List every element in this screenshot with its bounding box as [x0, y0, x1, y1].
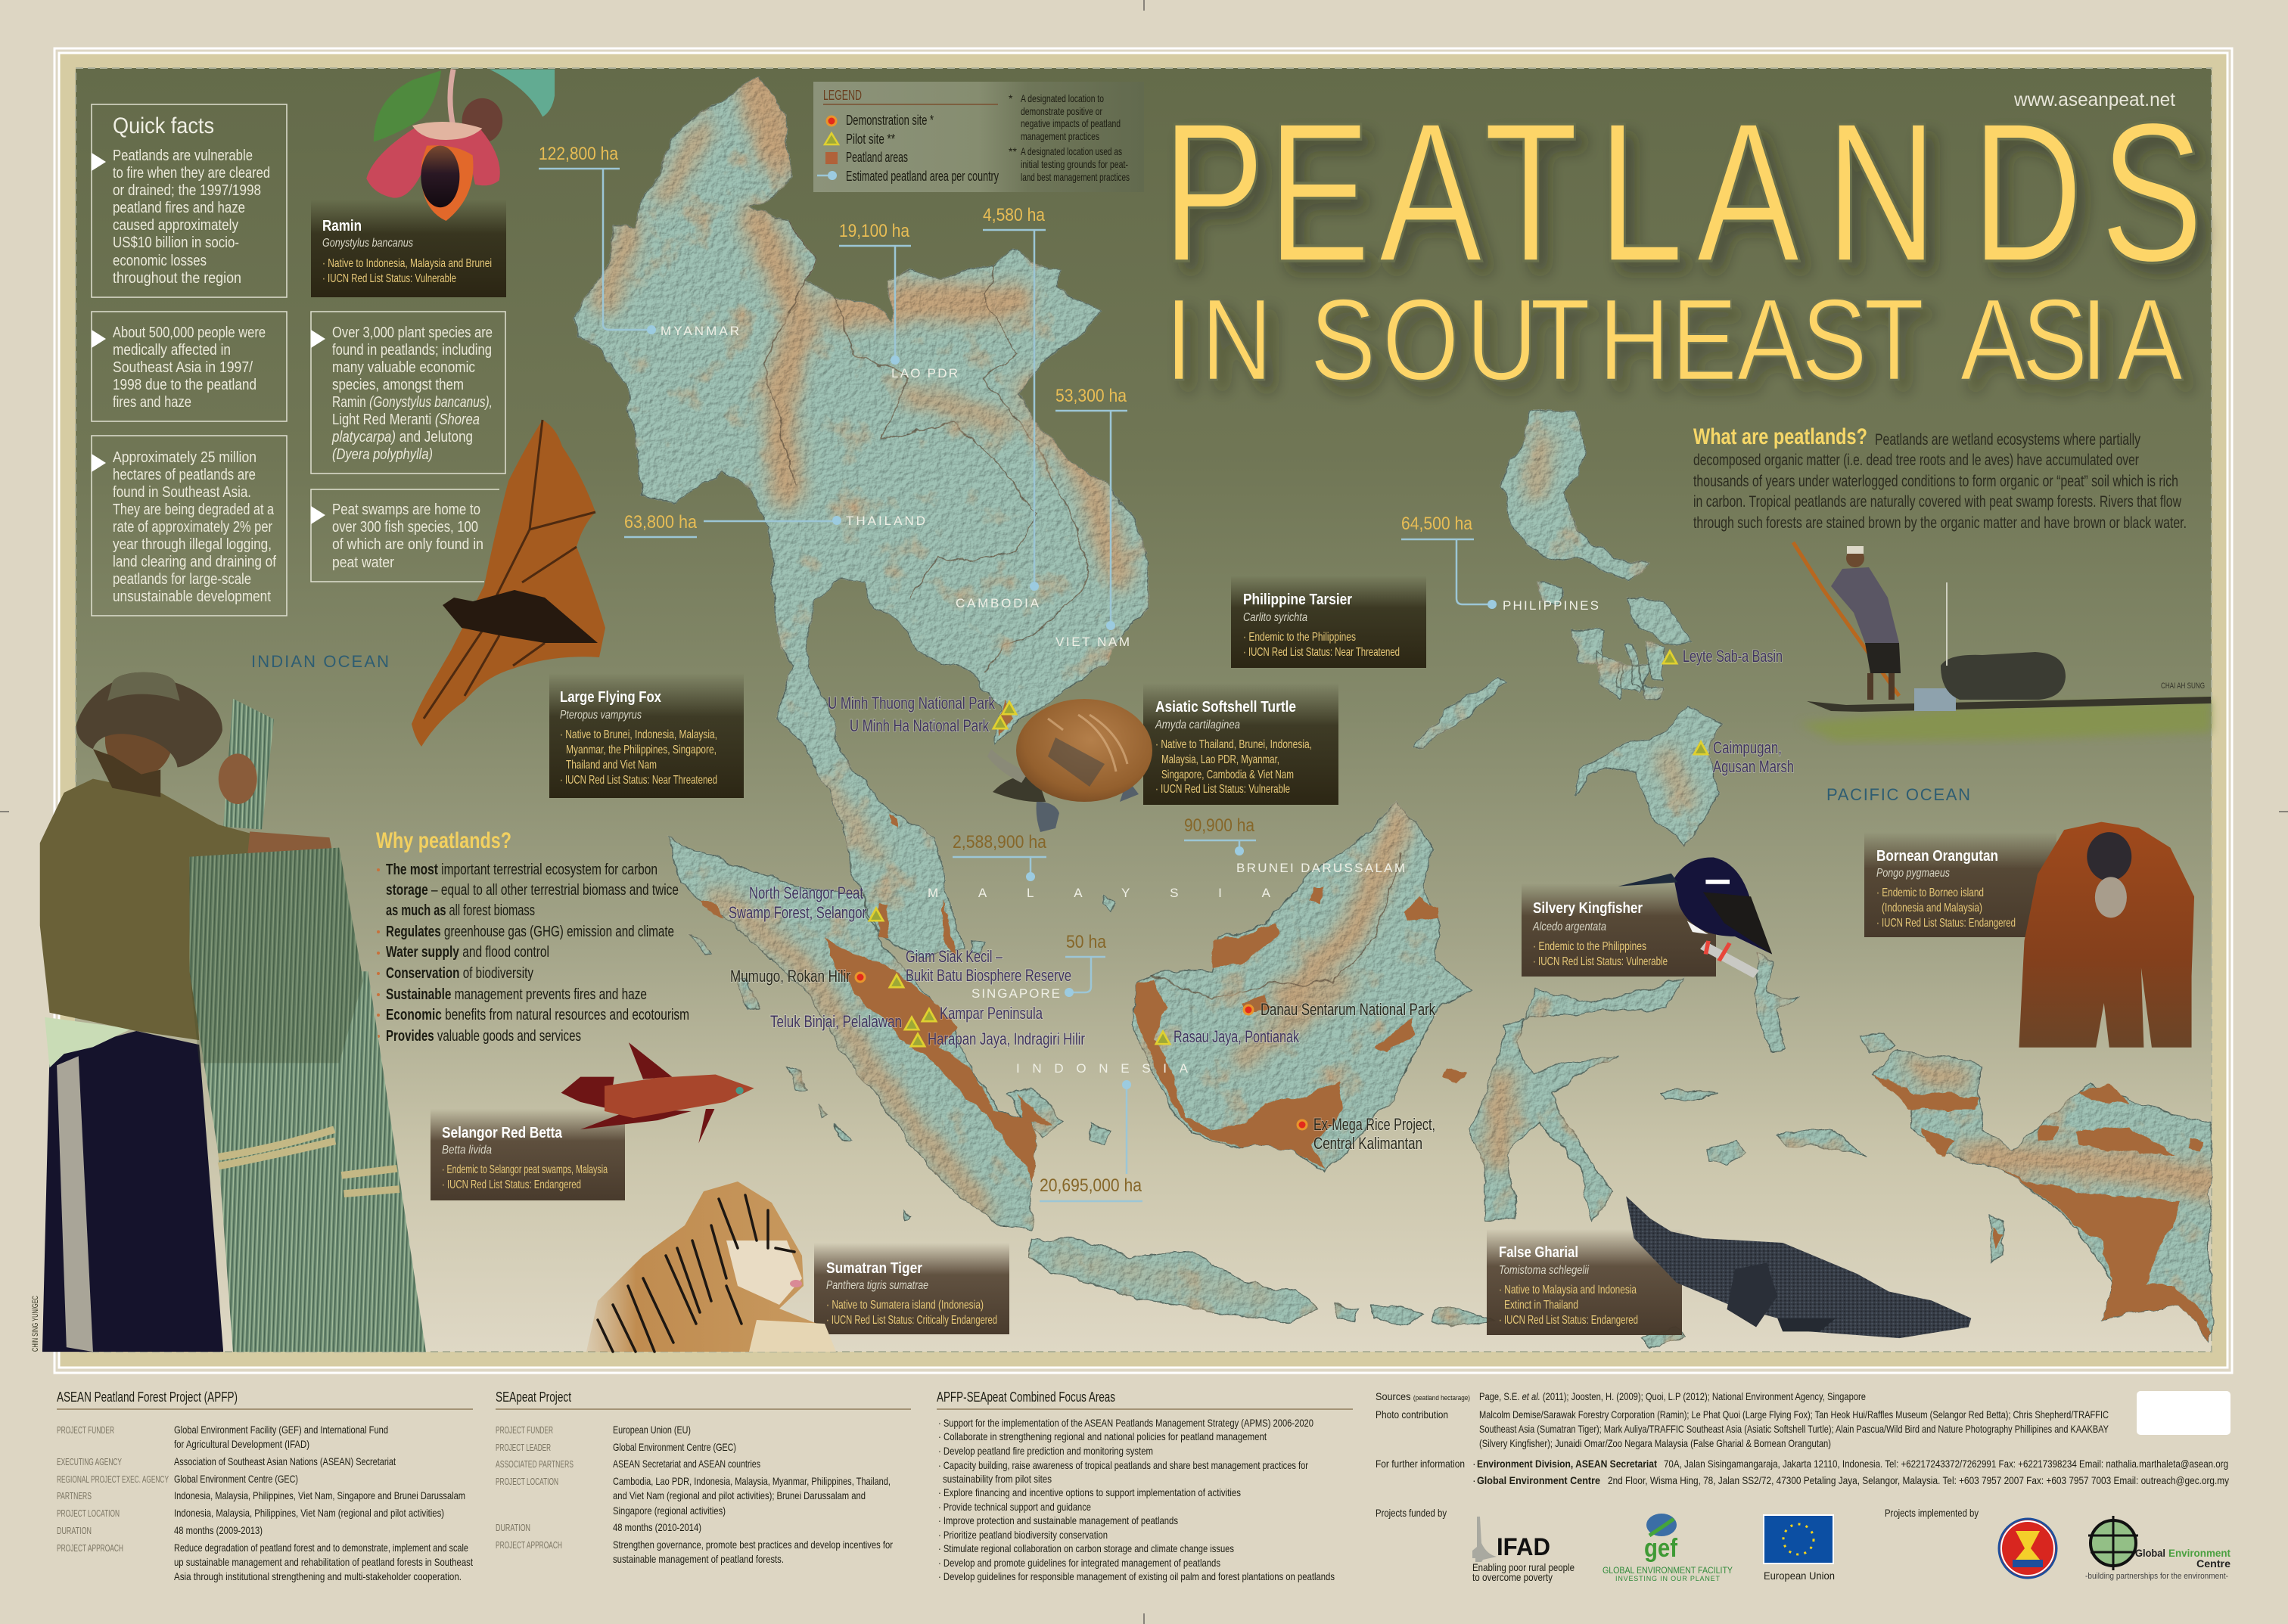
text block: why peatlands: Economic benefits from natural resources and ecotourism: [386, 1007, 689, 1023]
panel: APFP project: Global Environment Centre (GEC): [174, 1473, 298, 1485]
text block: sources and contacts: Page, S.E. et al. (2011); Joosten, H. (2009); Quoi, L.P (2012); National Environment Agency, Singapore: [1479, 1390, 1866, 1402]
text block: why peatlands: as much as all forest biomass: [386, 902, 535, 919]
site: Rasau Jaya: Rasau Jaya, Pontianak: [1174, 1027, 1300, 1046]
site: Kampar Peninsula: Kampar Peninsula: [940, 1004, 1043, 1023]
panel: combined focus areas: sustainability from pilot sites: [943, 1473, 1052, 1485]
callout: Viet Nam peatland area: 53,300 ha: [1055, 386, 1127, 406]
quick fact box: health: medically affected in: [113, 342, 231, 359]
quick fact box: degradation: peatlands for large-scale: [113, 571, 251, 588]
callout: Viet Nam peatland area: VIET NAM: [1055, 635, 1130, 649]
text block: sources and contacts: Malcolm Demise/Sarawak Forestry Corporation (Ramin); Le Phat Quoi (Large Flying Fox); Tan Heok Hui/Raffles Museum (Selangor Red Betta); Chris Shepherd/TRAFFIC: [1479, 1408, 2109, 1421]
text block: why peatlands: [376, 828, 689, 1045]
illustration: ramin flower: [366, 70, 555, 221]
text block: what are peatlands: decomposed organic matter (i.e. dead tree roots and le aves) have accumulated over: [1693, 452, 2139, 469]
species card: Large Flying Fox: · Native to Brunei, Indonesia, Malaysia,: [560, 728, 717, 741]
title: PEATLANDS: [1161, 80, 2203, 303]
panel: combined focus areas: · Develop guidelines for responsible management of existing oil palm and forest plantations on peatlands: [938, 1570, 1335, 1582]
logo: European Union: [1764, 1515, 1835, 1582]
species card: False Gharial: · Native to Malaysia and Indonesia: [1499, 1284, 1637, 1296]
panel: combined focus areas: · Develop and promote guidelines for integrated management of peatlands: [938, 1557, 1220, 1569]
species card: Asiatic Softshell Turtle: Singapore, Cambodia & Viet Nam: [1161, 769, 1294, 781]
callout: Singapore peatland area: SINGAPORE: [971, 986, 1060, 1001]
quick fact box: health: About 500,000 people were: [113, 324, 266, 341]
main panel background: [76, 68, 2212, 1352]
logo: IFAD: Enabling poor rural people: [1472, 1561, 1575, 1573]
illustration: boatman on peat swamp: CHAI AH SUNG: [2161, 682, 2205, 691]
quick fact box: plants: Ramin (Gonystylus bancanus),: [332, 394, 493, 411]
panel: APFP project: PROJECT APPROACH: [57, 1542, 123, 1554]
species card: Philippine Tarsier: [1231, 576, 1426, 668]
site: North Selangor: North Selangor Peat: [749, 883, 863, 902]
species card: False Gharial: Extinct in Thailand: [1504, 1299, 1578, 1312]
panel: APFP project: DURATION: [57, 1525, 92, 1536]
legend panel: Peatland areas: [846, 150, 908, 165]
species card: Philippine Tarsier: Philippine Tarsier: [1243, 592, 1352, 608]
legend panel: initial testing grounds for peat-: [1021, 158, 1128, 170]
callout: Brunei peatland area: 90,900 ha: [1184, 815, 1255, 836]
quick fact box: fires: throughout the region: [113, 270, 241, 287]
species card: Selangor Red Betta: Selangor Red Betta: [442, 1125, 563, 1141]
panel: SEApeat project: DURATION: [496, 1522, 530, 1533]
illustration: boatman on peat swamp: [1793, 542, 2211, 741]
callout: Brunei peatland area: [1184, 815, 1405, 875]
species card: Bornean Orangutan: · IUCN Red List Status: Endangered: [1876, 917, 2016, 930]
illustration: false gharial: [1626, 1196, 1971, 1338]
panel: APFP project: Indonesia, Malaysia, Philippines, Viet Nam, Singapore and Brunei Darussalam: [174, 1489, 465, 1501]
species card: Asiatic Softshell Turtle: · IUCN Red List Status: Vulnerable: [1155, 783, 1290, 796]
callout: Thailand peatland area: THAILAND: [846, 514, 925, 528]
panel: APFP project: for Agricultural Development (IFAD): [174, 1438, 309, 1450]
quick fact box: health: [92, 312, 287, 421]
panel: combined focus areas: · Stimulate regional collaboration on carbon storage and climate change issues: [938, 1542, 1234, 1554]
callout: Thailand peatland area: 63,800 ha: [624, 512, 698, 533]
callout: Singapore peatland area: [971, 932, 1107, 1001]
text block: what are peatlands: Peatlands are wetland ecosystems where partially: [1875, 431, 2140, 449]
quick fact box: degradation: [92, 436, 287, 616]
species card: False Gharial: Tomistoma schlegelii: [1499, 1264, 1589, 1277]
panel: APFP project: ASEAN Peatland Forest Project (APFP): [57, 1390, 238, 1405]
logo: GEF: INVESTING IN OUR PLANET: [1615, 1575, 1721, 1582]
species card: False Gharial: · IUCN Red List Status: Endangered: [1499, 1314, 1638, 1327]
panel: APFP project: Global Environment Facility (GEF) and International Fund: [174, 1424, 388, 1436]
text block: why peatlands: Sustainable management prevents fires and haze: [386, 986, 647, 1003]
illustration: orangutan: [2019, 822, 2194, 1048]
panel: SEApeat project: Cambodia, Lao PDR, Indonesia, Malaysia, Myanmar, Philippines, Thailand,: [613, 1475, 891, 1487]
species card: Bornean Orangutan: [1864, 832, 2056, 937]
site: Caimpugan: Agusan Marsh: [1713, 757, 1794, 776]
quick fact box: fish: over 300 fish species, 100: [332, 519, 478, 536]
label: Indian Ocean: INDIAN OCEAN: [251, 652, 389, 671]
panel: SEApeat project: PROJECT FUNDER: [496, 1424, 553, 1436]
quick fact box: degradation: found in Southeast Asia.: [113, 484, 251, 501]
logo: Global Environment Centre: Global: [2135, 1547, 2165, 1559]
species card: False Gharial: False Gharial: [1499, 1244, 1578, 1261]
panel: combined focus areas: APFP-SEApeat Combined Focus Areas: [937, 1390, 1115, 1405]
text block: why peatlands: Provides valuable goods and services: [386, 1028, 581, 1045]
panel: APFP project: [57, 1390, 473, 1582]
photo credit: CHIN SING YUN/GEC: [31, 1296, 40, 1352]
panel: combined focus areas: · Collaborate in strengthening regional and national policies for peatland management: [938, 1430, 1267, 1442]
callout: Lao PDR peatland area: [839, 221, 958, 380]
panel: APFP project: EXECUTING AGENCY: [57, 1456, 122, 1467]
quick fact box: plants: species, amongst them: [332, 377, 464, 393]
quick fact box: health: Southeast Asia in 1997/: [113, 359, 253, 376]
panel: quick facts: [92, 104, 505, 616]
panel: SEApeat project: PROJECT APPROACH: [496, 1539, 562, 1551]
text block: sources and contacts: For further information: [1376, 1458, 1465, 1470]
panel: APFP project: REGIONAL PROJECT EXEC. AGENCY: [57, 1473, 169, 1485]
callout: Cambodia peatland area: 4,580 ha: [983, 205, 1046, 225]
panel: SEApeat project: ASSOCIATED PARTNERS: [496, 1458, 574, 1470]
quick fact box: degradation: rate of approximately 2% per: [113, 519, 272, 536]
logo: European Union: European Union: [1764, 1570, 1835, 1582]
logo: IFAD: to overcome poverty: [1472, 1571, 1553, 1583]
panel: SEApeat project: and Viet Nam (regional and pilot activities); Brunei Darussalam and: [613, 1489, 866, 1501]
legend panel: negative impacts of peatland: [1021, 117, 1121, 129]
species card: Selangor Red Betta: Betta livida: [442, 1144, 492, 1157]
text block: what are peatlands: What are peatlands?: [1693, 424, 1867, 449]
quick fact box: plants: [311, 312, 505, 474]
map: land relief of Southeast Asia: [571, 76, 2211, 1350]
legend panel: land best management practices: [1021, 171, 1130, 183]
species card: Selangor Red Betta: · Endemic to Selangor peat swamps, Malaysia: [442, 1163, 608, 1176]
map: peatland areas: [702, 698, 2211, 1340]
quick fact box: fires: [92, 104, 287, 297]
panel: SEApeat project: PROJECT LOCATION: [496, 1476, 558, 1487]
callout: Philippines peatland area: [1401, 514, 1599, 613]
text: projects implemented by: Projects implemented by: [1885, 1507, 1979, 1519]
illustration: sumatran tiger: [586, 1182, 836, 1352]
quick fact box: degradation: hectares of peatlands are: [113, 467, 256, 483]
species card: Asiatic Softshell Turtle: · Native to Thailand, Brunei, Indonesia,: [1155, 738, 1312, 751]
panel: combined focus areas: · Support for the implementation of the ASEAN Peatlands Management Strategy (APMS) 2006-2020: [938, 1417, 1313, 1429]
white blank box: [2137, 1391, 2230, 1435]
panel: APFP project: Indonesia, Malaysia, Philippines, Viet Nam (regional and pilot activities): [174, 1507, 444, 1519]
species card: Large Flying Fox: Large Flying Fox: [560, 689, 661, 706]
quick fact box: degradation: unsustainable development: [113, 588, 271, 605]
text: projects funded by: Projects funded by: [1376, 1507, 1447, 1519]
site: Ex-Mega Rice: Ex-Mega Rice Project,: [1313, 1115, 1435, 1134]
species card: Ramin: Ramin: [322, 218, 362, 234]
callout: Malaysia peatland area: [928, 832, 1271, 900]
logo: ASEAN: [1999, 1519, 2056, 1578]
panel: combined focus areas: · Provide technical support and guidance: [938, 1501, 1091, 1513]
species card: Silvery Kingfisher: [1522, 883, 1716, 977]
panel: combined focus areas: [937, 1390, 1353, 1582]
site: Giam Siak Kecil: Bukit Batu Biosphere Reserve: [906, 966, 1071, 985]
quick fact box: degradation: Approximately 25 million: [113, 449, 256, 466]
illustration: flying fox bat: [412, 420, 605, 747]
panel: APFP project: 48 months (2009-2013): [174, 1524, 263, 1536]
quick fact box: degradation: year through illegal logging,: [113, 536, 272, 553]
callout: Indonesia peatland area: INDONESIA: [1016, 1061, 1189, 1076]
species card: Sumatran Tiger: · Native to Sumatera island (Indonesia): [826, 1299, 984, 1312]
site: North Selangor: Swamp Forest, Selangor: [729, 903, 866, 922]
callout: Viet Nam peatland area: [1055, 386, 1130, 649]
species card: Ramin: [311, 200, 506, 297]
quick fact box: fires: US$10 billion in socio-: [113, 234, 239, 251]
illustration: kingfisher: [1618, 857, 1772, 974]
text block: sources and contacts: Photo contribution: [1376, 1408, 1448, 1421]
site: Kampar Peninsula: [922, 1004, 1043, 1023]
quick fact box: plants: many valuable economic: [332, 359, 475, 376]
legend panel: management practices: [1021, 130, 1099, 142]
panel: SEApeat project: Strengthen governance, promote best practices and develop incentives for: [613, 1539, 893, 1551]
species card: Bornean Orangutan: (Indonesia and Malaysia): [1882, 902, 1982, 914]
legend panel: *: [1009, 92, 1013, 104]
logo: Global Environment Centre: [2085, 1516, 2230, 1581]
poster frame: [54, 48, 2232, 1373]
quick fact box: fires: to fire when they are cleared: [113, 165, 270, 182]
text block: sources and contacts: Environment Division, ASEAN Secretariat: [1477, 1458, 1657, 1470]
panel: APFP project: Reduce degradation of peatland forest and to demonstrate, implement and scale: [174, 1542, 468, 1554]
species card: Ramin: · Native to Indonesia, Malaysia and Brunei: [322, 257, 492, 270]
quick fact box: fish: of which are only found in: [332, 536, 483, 553]
callout: Cambodia peatland area: CAMBODIA: [956, 596, 1040, 610]
panel: combined focus areas: · Develop peatland fire prediction and monitoring system: [938, 1445, 1153, 1457]
logo: GEF: [1603, 1514, 1733, 1582]
site: Leyte Sab-a Basin: [1663, 647, 1783, 666]
legend panel: demonstrate positive or: [1021, 105, 1102, 117]
panel: combined focus areas: · Explore financing and incentive options to support implementation of activities: [938, 1486, 1241, 1498]
legend panel: A designated location used as: [1021, 145, 1122, 157]
panel: SEApeat project: Global Environment Centre (GEC): [613, 1441, 736, 1453]
text block: sources and contacts: ·: [1472, 1474, 1476, 1486]
panel: SEApeat project: ASEAN Secretariat and ASEAN countries: [613, 1458, 760, 1470]
species card: Sumatran Tiger: · IUCN Red List Status: Critically Endangered: [826, 1314, 997, 1327]
quick fact box: fires: or drained; the 1997/1998: [113, 182, 261, 199]
species card: Large Flying Fox: Myanmar, the Philippines, Singapore,: [566, 744, 717, 756]
legend panel: Demonstration site *: [846, 113, 934, 128]
text block: sources and contacts: ·: [1472, 1458, 1476, 1470]
logo: GEF: gef: [1644, 1534, 1678, 1563]
illustration: red betta fish: [561, 1042, 754, 1143]
text block: why peatlands: Regulates greenhouse gas (GHG) emission and climate: [386, 924, 674, 940]
quick fact box: plants: Light Red Meranti (Shorea: [332, 411, 480, 428]
quick fact box: degradation: They are being degraded at a: [113, 501, 275, 518]
logo: Global Environment Centre: Centre: [2196, 1557, 2230, 1570]
quick fact box: fires: caused approximately: [113, 217, 238, 234]
logo: IFAD: [1472, 1517, 1575, 1583]
legend panel: [813, 82, 1144, 192]
species card: Bornean Orangutan: Bornean Orangutan: [1876, 848, 1998, 865]
species card: Silvery Kingfisher: Silvery Kingfisher: [1533, 900, 1643, 917]
legend panel: Estimated peatland area per country: [846, 169, 999, 184]
text block: why peatlands: storage – equal to all other terrestrial biomass and twice: [386, 882, 679, 899]
site: U Minh Ha: U Minh Ha National Park: [850, 716, 990, 735]
species card: Sumatran Tiger: Sumatran Tiger: [826, 1260, 922, 1277]
callout: Indonesia peatland area: 20,695,000 ha: [1040, 1175, 1142, 1196]
panel: APFP project: Asia through institutional strengthening and multi-stakeholder cooperation.: [174, 1570, 462, 1582]
callout: Philippines peatland area: 64,500 ha: [1401, 514, 1473, 534]
species card: False Gharial: [1487, 1229, 1682, 1335]
logo: Global Environment Centre: Environment: [2168, 1547, 2230, 1559]
panel: SEApeat project: Singapore (regional activities): [613, 1504, 726, 1517]
quick fact box: degradation: land clearing and draining of: [113, 554, 276, 570]
panel: SEApeat project: [496, 1390, 911, 1565]
text block: sources and contacts: [1376, 1390, 2229, 1486]
site: Rasau Jaya: [1156, 1027, 1300, 1046]
callout: Philippines peatland area: PHILIPPINES: [1503, 598, 1599, 613]
quick fact box: plants: Over 3,000 plant species are: [332, 324, 493, 341]
panel: APFP project: up sustainable management and rehabilitation of peatland forests in Southeast: [174, 1556, 473, 1568]
site: Giam Siak Kecil: Giam Siak Kecil –: [906, 947, 1003, 966]
callout: Malaysia peatland area: 2,588,900 ha: [953, 832, 1047, 852]
callout: Myanmar peatland area: [539, 144, 739, 338]
panel: combined focus areas: · Capacity building, raise awareness of tropical peatlands and share best management practices for: [938, 1459, 1308, 1471]
quick fact box: health: fires and haze: [113, 394, 191, 411]
text block: what are peatlands: [1693, 424, 2187, 532]
text block: why peatlands: Why peatlands?: [376, 828, 511, 853]
site: Caimpugan: [1694, 738, 1794, 776]
panel: SEApeat project: 48 months (2010-2014): [613, 1521, 701, 1533]
legend panel: A designated location to: [1021, 92, 1104, 104]
species card: Bornean Orangutan: Pongo pygmaeus: [1876, 867, 1950, 880]
species card: Sumatran Tiger: [814, 1243, 1009, 1334]
site: Caimpugan: Caimpugan,: [1713, 738, 1782, 757]
text block: sources and contacts: Southeast Asia (Sumatran Tiger); Mark Auliya/TRAFFIC Southeast Asia (Asiatic Softshell Turtle); Alain Pascua/Wild Bird and Nature Photography Phillipines and KAAKBAY: [1479, 1423, 2109, 1435]
species card: Ramin: Gonystylus bancanus: [322, 237, 413, 250]
species card: Selangor Red Betta: [431, 1109, 625, 1200]
species card: Asiatic Softshell Turtle: [1143, 683, 1338, 805]
species card: Asiatic Softshell Turtle: Malaysia, Lao PDR, Myanmar,: [1161, 753, 1279, 766]
quick fact box: fish: Peat swamps are home to: [332, 501, 480, 518]
species card: Asiatic Softshell Turtle: Amyda cartilaginea: [1155, 719, 1240, 731]
quick fact box: plants: platycarpa) and Jelutong: [331, 429, 473, 446]
quick fact box: fires: Quick facts: [113, 113, 214, 138]
panel: APFP project: Association of Southeast Asian Nations (ASEAN) Secretariat: [174, 1455, 396, 1467]
text block: sources and contacts: (Silvery Kingfisher); Junaidi Omar/Zoo Negara Malaysia (False Gharial & Bornean Orangutan): [1479, 1437, 1831, 1449]
species card: Asiatic Softshell Turtle: Asiatic Softshell Turtle: [1155, 699, 1296, 716]
website url: www.aseanpeat.net: [2013, 89, 2175, 110]
species card: Large Flying Fox: Thailand and Viet Nam: [566, 759, 657, 772]
quick fact box: plants: (Dyera polyphylla): [332, 446, 433, 463]
site: Ex-Mega Rice: [1298, 1115, 1435, 1153]
panel: APFP project: PROJECT FUNDER: [57, 1424, 114, 1436]
label: Pacific Ocean: PACIFIC OCEAN: [1826, 785, 1970, 804]
panel: SEApeat project: European Union (EU): [613, 1424, 691, 1436]
photo: woman with reed bundles: [40, 672, 426, 1352]
species card: Philippine Tarsier: Carlito syrichta: [1243, 611, 1307, 624]
quick fact box: fires: Peatlands are vulnerable: [113, 147, 253, 164]
panel: SEApeat project: SEApeat Project: [496, 1390, 571, 1405]
legend panel: **: [1009, 145, 1017, 157]
logo: GEF: GLOBAL ENVIRONMENT FACILITY: [1603, 1565, 1733, 1576]
text block: why peatlands: The most important terrestrial ecosystem for carbon: [386, 862, 657, 878]
species card: Sumatran Tiger: Panthera tigris sumatrae: [826, 1279, 928, 1292]
callout: Indonesia peatland area: [1016, 1061, 1189, 1201]
text block: sources and contacts: Sources (peatland hectarage): [1376, 1390, 1470, 1402]
quick fact box: fires: economic losses: [113, 253, 207, 269]
panel: SEApeat project: sustainable management of peatland forests.: [613, 1553, 784, 1565]
species card: Silvery Kingfisher: · Endemic to the Philippines: [1533, 940, 1646, 953]
quick fact box: fires: peatland fires and haze: [113, 200, 245, 216]
panel: SEApeat project: PROJECT LEADER: [496, 1442, 551, 1453]
site: Danau Sentarum: Danau Sentarum National Park: [1261, 1000, 1436, 1019]
callout: Myanmar peatland area: MYANMAR: [661, 324, 739, 338]
legend panel: LEGEND: [823, 88, 862, 103]
callout: Brunei peatland area: BRUNEI DARUSSALAM: [1236, 861, 1405, 875]
species card: Ramin: · IUCN Red List Status: Vulnerable: [322, 272, 456, 285]
species card: Philippine Tarsier: · Endemic to the Philippines: [1243, 631, 1356, 644]
panel: APFP project: PARTNERS: [57, 1490, 92, 1501]
panel: combined focus areas: · Improve protection and sustainable management of peatlands: [938, 1514, 1178, 1526]
quick fact box: health: 1998 due to the peatland: [113, 377, 256, 393]
illustration: softshell turtle: [987, 699, 1152, 832]
quick fact box: plants: found in peatlands; including: [332, 342, 492, 359]
logo: IFAD: IFAD: [1497, 1533, 1550, 1560]
legend panel: Pilot site **: [846, 132, 895, 147]
title: IN SOUTHEAST ASIA: [1165, 275, 2184, 405]
callout: Thailand peatland area: [624, 512, 925, 537]
species card: Large Flying Fox: · IUCN Red List Status: Near Threatened: [560, 774, 717, 787]
site: Mumugo, Rokan Hilir: Mumugo, Rokan Hilir: [730, 967, 850, 986]
title: [1161, 80, 2203, 405]
text block: why peatlands: Water supply and flood control: [386, 944, 549, 961]
species card: Silvery Kingfisher: · IUCN Red List Status: Vulnerable: [1533, 955, 1668, 968]
quick fact box: fish: peat water: [332, 554, 394, 571]
species card: Large Flying Fox: [549, 673, 744, 798]
panel: APFP project: PROJECT LOCATION: [57, 1508, 120, 1519]
logo: Global Environment Centre: -building partnerships for the environment-: [2085, 1572, 2228, 1581]
callout: Malaysia peatland area: MALAYSIA: [928, 886, 1271, 900]
species card: Philippine Tarsier: · IUCN Red List Status: Near Threatened: [1243, 646, 1400, 659]
site: U Minh Thuong: U Minh Thuong National Park: [828, 694, 996, 713]
text block: sources and contacts: Global Environment Centre: [1477, 1474, 1600, 1486]
site: North Selangor: [729, 883, 883, 922]
callout: Myanmar peatland area: 122,800 ha: [539, 144, 619, 164]
site: Giam Siak Kecil: [890, 947, 1071, 987]
species card: Selangor Red Betta: · IUCN Red List Status: Endangered: [442, 1178, 581, 1191]
species card: Silvery Kingfisher: Alcedo argentata: [1532, 921, 1606, 933]
text block: why peatlands: Conservation of biodiversity: [386, 965, 533, 982]
callout: Cambodia peatland area: [956, 205, 1046, 610]
callout: Lao PDR peatland area: LAO PDR: [891, 366, 958, 380]
quick fact box: fish: [311, 489, 499, 582]
species card: Large Flying Fox: Pteropus vampyrus: [560, 709, 642, 722]
site: Ex-Mega Rice: Central Kalimantan: [1313, 1134, 1422, 1153]
callout: Singapore peatland area: 50 ha: [1066, 932, 1107, 952]
species card: Bornean Orangutan: · Endemic to Borneo island: [1876, 887, 1984, 899]
callout: Lao PDR peatland area: 19,100 ha: [839, 221, 910, 241]
site: Leyte Sab-a Basin: Leyte Sab-a Basin: [1683, 647, 1783, 666]
site: Teluk Binjai: Teluk Binjai, Pelalawan: [770, 1012, 902, 1031]
panel: combined focus areas: · Prioritize peatland biodiversity conservation: [938, 1529, 1108, 1541]
site: Harapan Jaya: Harapan Jaya, Indragiri Hilir: [928, 1029, 1085, 1048]
